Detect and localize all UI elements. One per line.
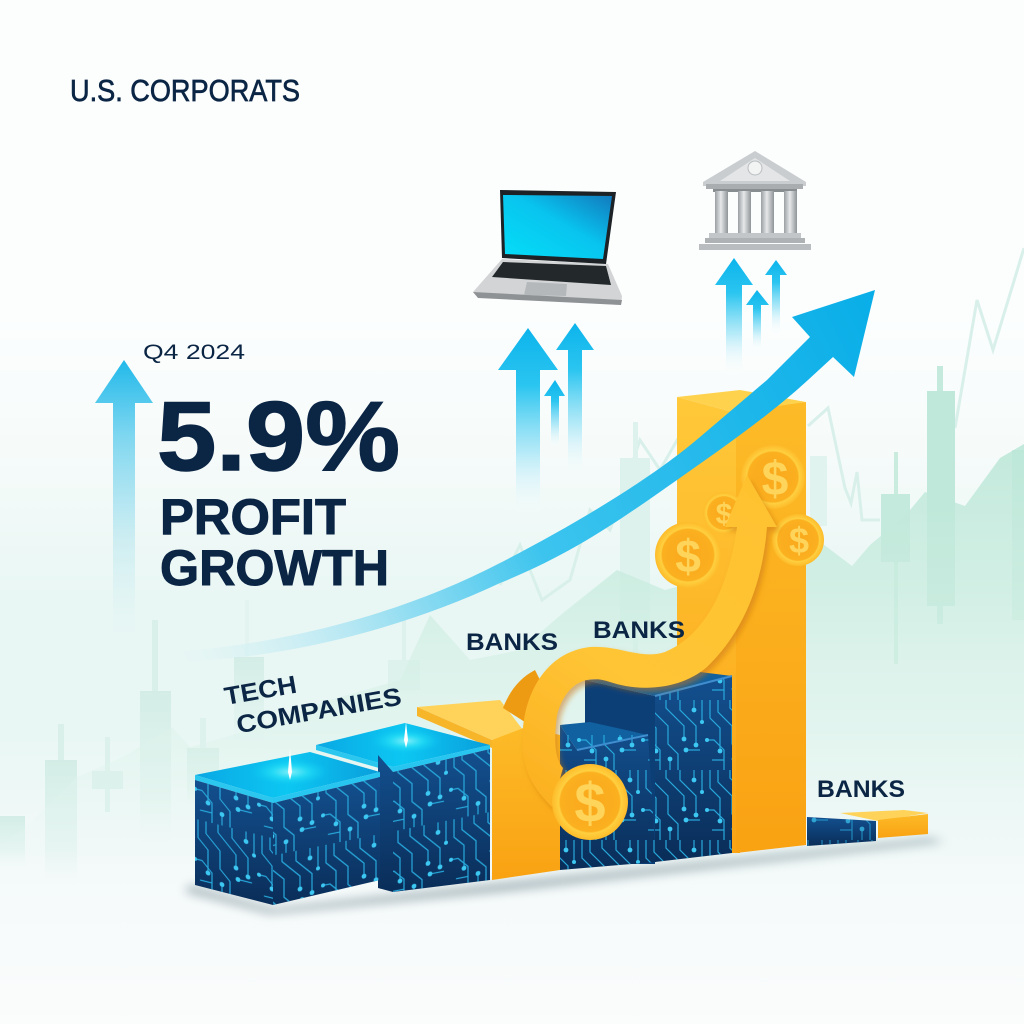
coin: $	[574, 771, 606, 834]
coin	[741, 445, 805, 509]
bar: small gold	[840, 810, 928, 838]
cube: tech two	[316, 722, 490, 892]
coin	[703, 492, 745, 534]
title: U.S. CORPORATS	[70, 73, 300, 108]
coin: $	[675, 530, 701, 582]
arrows: above tech	[498, 323, 594, 520]
bar: small blue	[807, 817, 876, 846]
coin	[655, 522, 721, 588]
big number: 5.9%	[157, 381, 400, 491]
area: green mountains	[0, 444, 1024, 905]
arrows: above bank	[715, 258, 787, 375]
bar: low gold	[417, 700, 560, 880]
label: tech companies	[222, 653, 404, 740]
coin: $	[716, 498, 733, 531]
bar: tall gold	[677, 390, 806, 853]
icon: bank building	[699, 151, 811, 250]
floor shadow	[185, 838, 945, 914]
label: banks two: BANKS	[593, 617, 685, 644]
coin: $	[762, 453, 789, 506]
period label: Q4 2024	[143, 341, 245, 364]
ribbon	[522, 475, 777, 807]
arrow: left rising arrow	[95, 360, 153, 660]
headline block: GROWTH	[160, 540, 389, 596]
label: tech companies: TECH	[222, 671, 299, 711]
candlesticks	[0, 366, 1024, 885]
bar: rear blue	[585, 672, 732, 864]
bar: front blue	[560, 722, 656, 870]
label: tech companies: COMPANIES	[234, 683, 404, 739]
ribbon fold	[503, 670, 545, 724]
coin: $	[789, 520, 809, 561]
cube: tech one	[195, 748, 380, 905]
gold ribbon arrow with coins	[503, 445, 824, 840]
line trace	[500, 248, 1024, 600]
label: banks three: BANKS	[817, 776, 905, 803]
background market chart	[0, 248, 1024, 905]
coin	[552, 764, 628, 840]
icon: laptop	[473, 190, 622, 305]
profit growth: PROFIT	[160, 489, 346, 545]
coin	[772, 514, 824, 566]
curved growth arrow	[170, 290, 875, 662]
headline block	[143, 341, 400, 596]
label: banks one: BANKS	[466, 629, 558, 656]
